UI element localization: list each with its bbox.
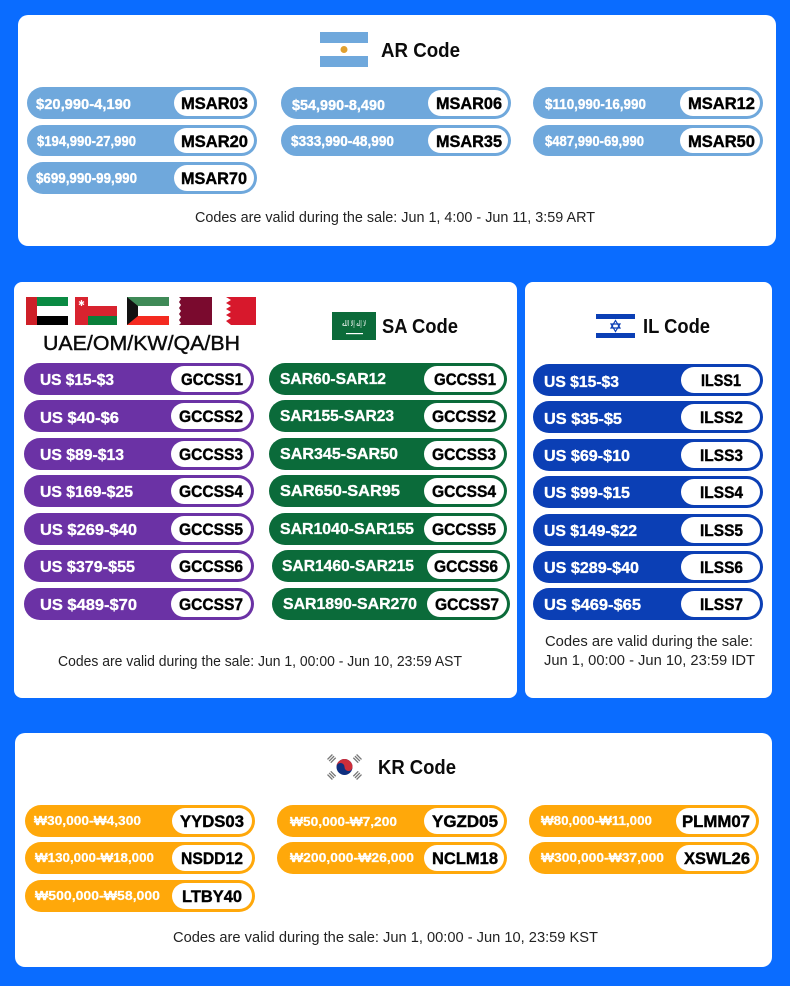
code pill: YGZD05: ₩50,000-₩7,200 — [290, 815, 397, 829]
code pill: GCCSS6 UAE: US $379-$55 — [40, 559, 135, 576]
heading: KR Code: KR Code — [378, 757, 456, 779]
validity note: GCC and SA: Codes are valid during the sale: Jun 1, 00:00 - Jun 10, 23:59 AST — [58, 654, 462, 670]
heading: UAE/OM/KW/QA/BH: UAE/OM/KW/QA/BH — [43, 333, 240, 355]
code pill: MSAR12: MSAR12 — [688, 95, 755, 113]
code pill: MSAR35: $333,990-48,990 — [291, 133, 394, 150]
code pill: GCCSS3 SA — [269, 438, 507, 470]
code pill: NCLM18: ₩200,000-₩26,000 — [290, 851, 414, 865]
code pill: NSDD12: ₩130,000-₩18,000 — [35, 851, 154, 865]
code pill: MSAR03: MSAR03 — [181, 95, 248, 113]
code pill: ILSS7: ILSS7 — [700, 596, 743, 614]
code pill: GCCSS1 UAE — [24, 363, 254, 395]
validity note: IL: Codes are valid during the sale: — [545, 634, 753, 650]
icon: Saudi Arabia flag — [332, 312, 376, 340]
code pill: ILSS4: ILSS4 — [700, 484, 744, 502]
code pill: LTBY40: ₩500,000-₩58,000 — [35, 889, 160, 903]
code pill: GCCSS4 SA: SAR650-SAR95 — [280, 483, 400, 500]
code pill: GCCSS4 UAE — [24, 475, 254, 507]
code pill: LTBY40: LTBY40 — [182, 888, 242, 906]
icon: South Korea flag — [330, 756, 360, 778]
code pill: GCCSS2 UAE: GCCSS2 — [179, 408, 243, 426]
code pill: ILSS1: US $15-$3 — [544, 374, 619, 391]
code pill: GCCSS7 SA — [272, 588, 510, 620]
code pill: MSAR03: $20,990-4,190 — [36, 96, 131, 113]
code pill: GCCSS5 UAE: US $269-$40 — [40, 522, 137, 539]
code pill: ILSS2 — [533, 401, 763, 433]
code pill: GCCSS4 SA — [269, 475, 507, 507]
code pill: GCCSS1 SA — [269, 363, 507, 395]
code pill: ILSS1: ILSS1 — [701, 372, 741, 390]
code pill: ILSS4: US $99-$15 — [544, 485, 630, 502]
code pill: GCCSS5 SA: SAR1040-SAR155 — [280, 521, 414, 538]
code pill: GCCSS7 UAE: US $489-$70 — [40, 597, 137, 614]
code pill: GCCSS5 SA — [269, 513, 507, 545]
code pill: GCCSS2 UAE — [24, 400, 254, 432]
code pill: GCCSS7 SA: SAR1890-SAR270 — [283, 596, 417, 613]
code pill: ILSS1 — [533, 364, 763, 396]
code pill: GCCSS3 UAE: US $89-$13 — [40, 447, 124, 464]
code pill: ILSS5 — [533, 514, 763, 546]
code pill: PLMM07: ₩80,000-₩11,000 — [541, 814, 652, 828]
icon: Oman flag: ✱ — [78, 299, 85, 308]
code pill: GCCSS4 UAE: US $169-$25 — [40, 484, 133, 501]
code pill: MSAR03 — [27, 87, 257, 119]
code pill: GCCSS3 SA: SAR345-SAR50 — [280, 446, 398, 463]
code pill: GCCSS7 UAE — [24, 588, 254, 620]
code pill: MSAR35 — [281, 125, 511, 156]
code pill: GCCSS6 UAE — [24, 550, 254, 582]
code pill: ILSS7 — [533, 588, 763, 620]
code pill: ILSS6: ILSS6 — [700, 559, 743, 577]
code pill: ILSS7: US $469-$65 — [544, 597, 641, 614]
code pill: GCCSS2 SA — [269, 400, 507, 432]
code pill: ILSS6: US $289-$40 — [544, 560, 639, 577]
icon: Oman flag — [75, 297, 117, 325]
code pill: GCCSS6 SA: GCCSS6 — [434, 558, 498, 576]
validity note: IL — [544, 634, 755, 669]
heading: AR Code: AR Code — [381, 40, 460, 62]
code pill: YGZD05: YGZD05 — [432, 813, 498, 831]
code pill: GCCSS5 UAE: GCCSS5 — [179, 521, 243, 539]
code pill: ILSS6 — [533, 551, 763, 583]
code pill: MSAR06: MSAR06 — [436, 95, 502, 113]
code pill: YGZD05 — [277, 805, 507, 837]
code pill: XSWL26 — [529, 842, 759, 874]
code pill: MSAR12 — [533, 87, 763, 119]
code pill: MSAR70 — [27, 162, 257, 194]
code pill: ILSS2: US $35-$5 — [544, 411, 622, 428]
code pill: GCCSS3 UAE: GCCSS3 — [179, 446, 243, 464]
icon: Kuwait flag — [127, 297, 169, 325]
code pill: MSAR70: MSAR70 — [181, 170, 247, 188]
heading: SA Code: SA Code — [382, 316, 458, 338]
code pill: NSDD12: NSDD12 — [181, 850, 243, 868]
icon: Qatar flag — [176, 297, 212, 325]
code pill: XSWL26: XSWL26 — [684, 850, 750, 868]
code pill: MSAR70: $699,990-99,990 — [36, 170, 137, 187]
code pill: ILSS2: ILSS2 — [700, 409, 743, 427]
code pill: ILSS3: ILSS3 — [700, 447, 743, 465]
validity note: KR: Codes are valid during the sale: Jun 1, 00:00 - Jun 10, 23:59 KST — [173, 930, 598, 946]
code pill: GCCSS5 UAE — [24, 513, 254, 545]
panel: AR code — [18, 15, 776, 246]
code pill: GCCSS4 UAE: GCCSS4 — [179, 483, 244, 501]
panel: IL code — [525, 282, 772, 698]
icon: Israel flag — [596, 314, 635, 338]
code pill: NCLM18: NCLM18 — [432, 850, 498, 868]
code pill: GCCSS1 UAE: US $15-$3 — [40, 372, 114, 389]
code pill: PLMM07: PLMM07 — [682, 813, 750, 831]
panel: GCC and SA codes — [14, 282, 517, 698]
code pill: MSAR20: MSAR20 — [181, 133, 248, 151]
code pill: NSDD12 — [25, 842, 255, 874]
code pill: GCCSS3 UAE — [24, 438, 254, 470]
code pill: GCCSS3 SA: GCCSS3 — [432, 446, 496, 464]
code pill: MSAR20 — [27, 125, 257, 156]
code pill: GCCSS2 UAE: US $40-$6 — [40, 410, 119, 427]
code pill: GCCSS7 UAE: GCCSS7 — [179, 596, 243, 614]
panel: KR code — [15, 733, 772, 967]
code pill: ILSS3: US $69-$10 — [544, 448, 630, 465]
code pill: MSAR06 — [281, 87, 511, 119]
code pill: YYDS03: ₩30,000-₩4,300 — [34, 814, 141, 828]
code pill: ILSS5: US $149-$22 — [544, 523, 637, 540]
code pill: MSAR35: MSAR35 — [436, 133, 502, 151]
code pill: GCCSS7 SA: GCCSS7 — [435, 596, 499, 614]
code pill: XSWL26: ₩300,000-₩37,000 — [541, 851, 664, 865]
icon: Saudi Arabia flag: لا إله إلا الله — [342, 319, 366, 329]
code pill: LTBY40 — [25, 880, 255, 912]
code pill: GCCSS2 SA: GCCSS2 — [432, 408, 496, 426]
code pill: YYDS03 — [25, 805, 255, 837]
code pill: GCCSS1 SA: SAR60-SAR12 — [280, 371, 386, 388]
code pill: GCCSS2 SA: SAR155-SAR23 — [280, 408, 394, 425]
code pill: ILSS4 — [533, 476, 763, 508]
code pill: MSAR20: $194,990-27,990 — [37, 133, 136, 150]
validity note: AR: Codes are valid during the sale: Jun 1, 4:00 - Jun 11, 3:59 ART — [195, 210, 595, 226]
code pill: GCCSS6 SA: SAR1460-SAR215 — [282, 558, 414, 575]
icon: Argentina flag — [320, 32, 368, 67]
code pill: MSAR50: $487,990-69,990 — [545, 133, 644, 150]
code pill: MSAR06: $54,990-8,490 — [292, 97, 385, 114]
code pill: MSAR50: MSAR50 — [688, 133, 755, 151]
code pill: ILSS3 — [533, 439, 763, 471]
code pill: GCCSS4 SA: GCCSS4 — [432, 483, 497, 501]
code pill: GCCSS1 UAE: GCCSS1 — [181, 371, 243, 389]
code pill: PLMM07 — [529, 805, 759, 837]
validity note: IL: Jun 1, 00:00 - Jun 10, 23:59 IDT — [544, 653, 755, 669]
code pill: MSAR12: $110,990-16,990 — [545, 96, 646, 113]
code pill: GCCSS6 SA — [272, 550, 510, 582]
code pill: GCCSS1 SA: GCCSS1 — [434, 371, 496, 389]
code pill: ILSS5: ILSS5 — [700, 522, 743, 540]
heading: IL Code: IL Code — [643, 316, 710, 338]
icon: Bahrain flag — [222, 297, 256, 325]
icon: UAE flag — [26, 297, 68, 325]
code pill: GCCSS5 SA: GCCSS5 — [432, 521, 496, 539]
code pill: YYDS03: YYDS03 — [180, 813, 244, 831]
code pill: MSAR50 — [533, 125, 763, 156]
code pill: GCCSS6 UAE: GCCSS6 — [179, 558, 243, 576]
code pill: NCLM18 — [277, 842, 507, 874]
